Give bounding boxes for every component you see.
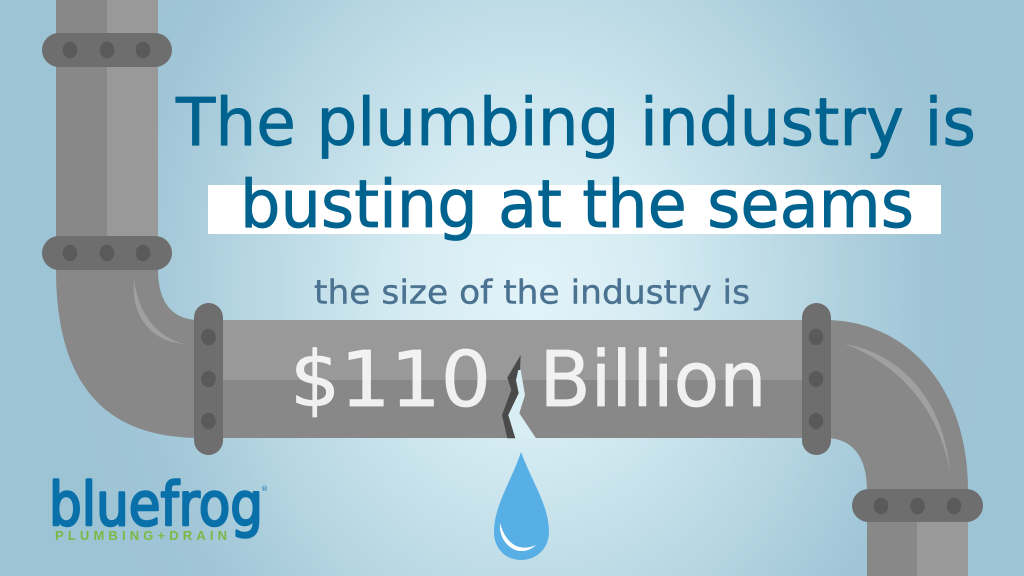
flange: horizontal pipe left — [194, 303, 223, 455]
subtitle: the size of the industry is — [314, 272, 750, 312]
flange: mid left — [42, 236, 172, 270]
horizontal pipe — [200, 320, 820, 438]
title line 2: busting at the seams — [240, 166, 914, 243]
figure: $110: $110 — [290, 336, 491, 425]
right pipe — [825, 320, 968, 576]
flange: bottom right — [852, 489, 983, 522]
flange: top left — [42, 33, 172, 67]
logo — [49, 470, 268, 543]
figure: Billion: Billion — [540, 336, 766, 425]
flange: horizontal pipe right — [802, 303, 831, 455]
pipe crack — [502, 355, 536, 438]
title highlight bar — [208, 185, 941, 234]
logo tagline: PLUMBING+DRAIN — [55, 528, 227, 543]
icon: water drop — [494, 452, 549, 560]
title line 1: The plumbing industry is — [175, 84, 976, 161]
logo wordmark: bluefrog — [49, 470, 263, 540]
left pipe — [56, 0, 200, 438]
logo registered mark: ® — [261, 485, 268, 493]
